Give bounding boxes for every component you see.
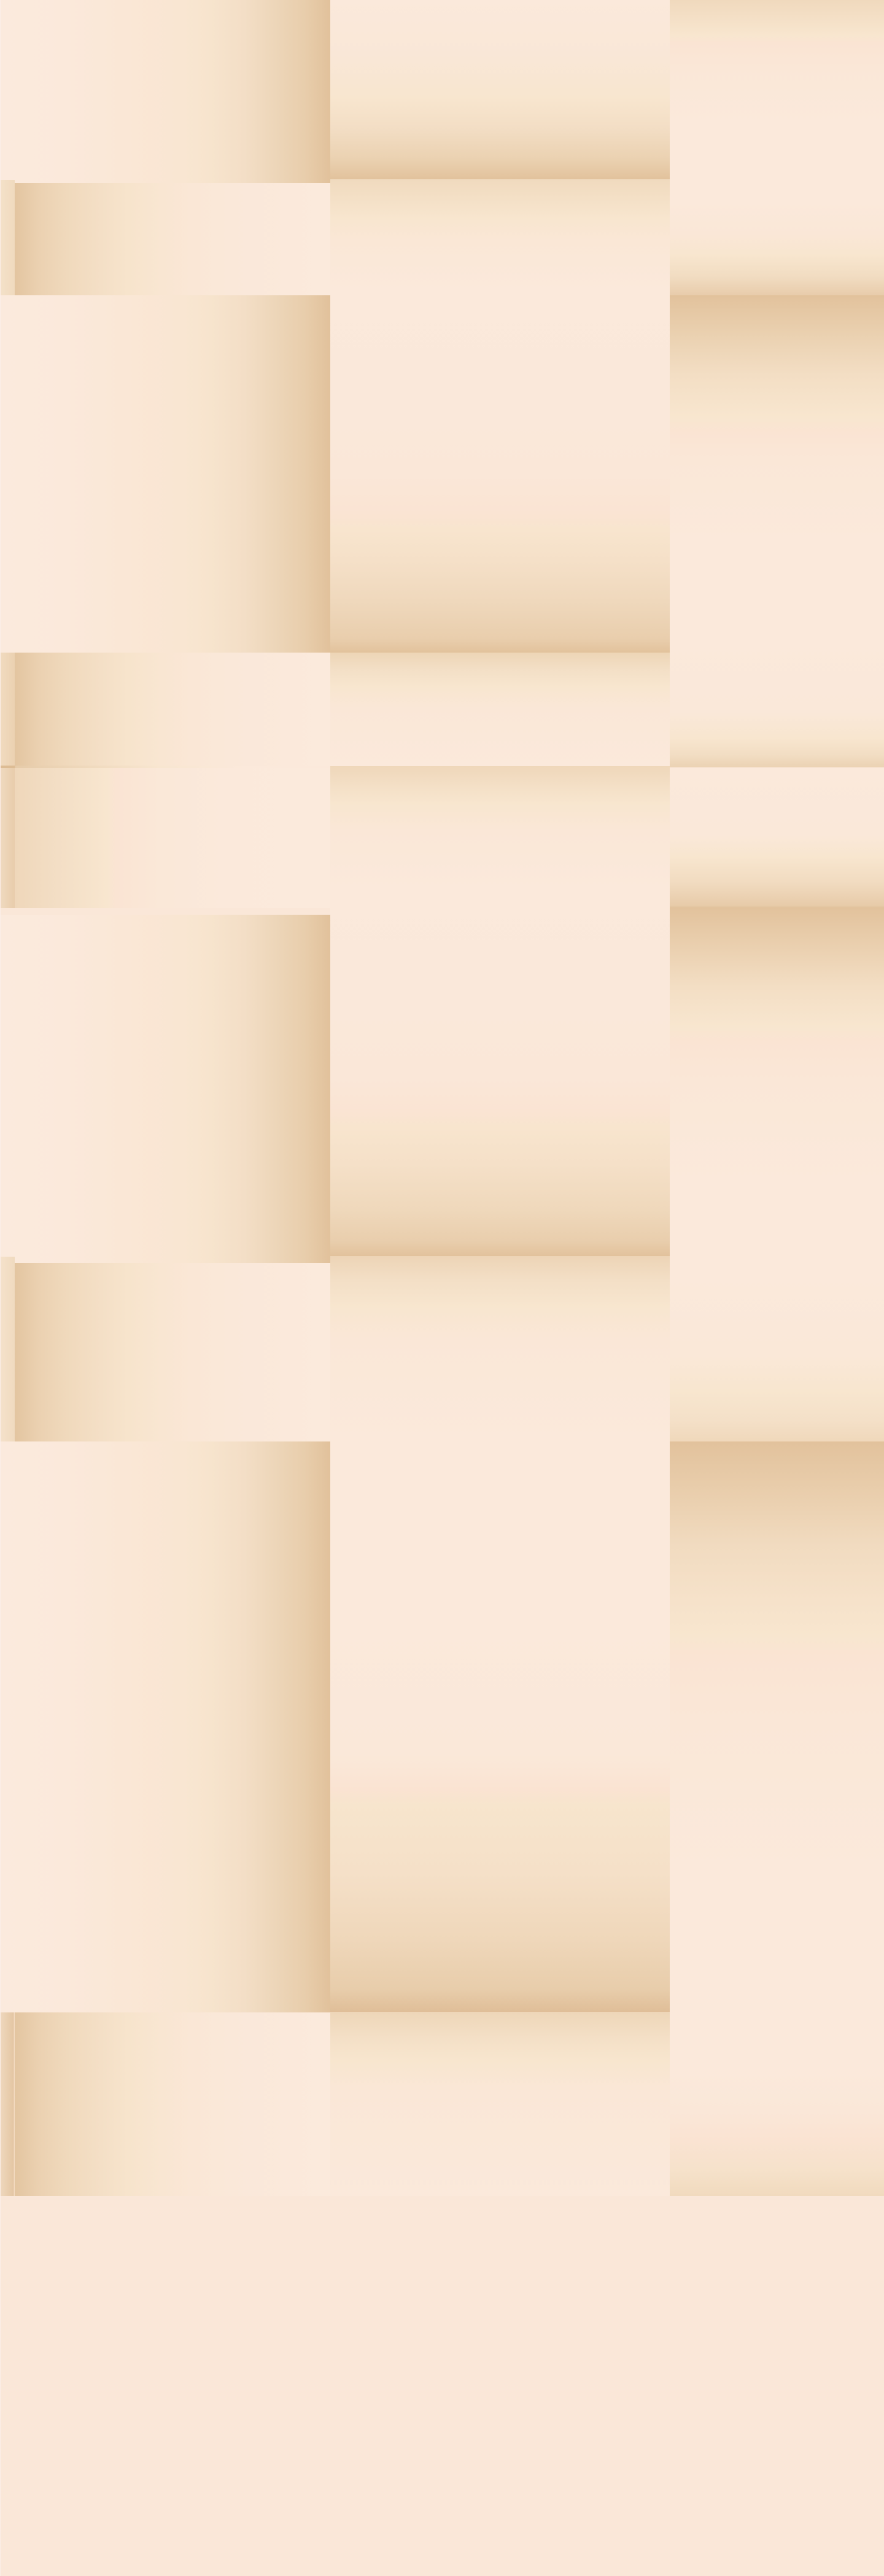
panel: left strip 3 bbox=[0, 768, 15, 908]
panel: left column block 9 bbox=[15, 2012, 330, 2196]
panel: right column block 2 bbox=[670, 295, 884, 767]
panel: right column block 1 bbox=[670, 0, 884, 295]
panel: left column block 3 bbox=[0, 295, 330, 653]
panel: left column block 6 bbox=[0, 915, 330, 1263]
panel: left column block 2 bbox=[15, 183, 330, 295]
panel: left strip 5 bbox=[0, 2012, 15, 2196]
panel: left column block 1 bbox=[0, 0, 330, 183]
panel: left column block 7 bbox=[15, 1263, 330, 1441]
panel: left column block 5 bbox=[15, 768, 330, 908]
panel: middle column block 2 bbox=[330, 179, 670, 653]
left edge line bbox=[0, 0, 1, 2576]
panel: left strip 1 bbox=[0, 180, 15, 295]
panel: left column block 4 bbox=[15, 653, 330, 766]
panel: middle column block 1 bbox=[330, 0, 670, 179]
panel: middle column block 3 bbox=[330, 653, 670, 766]
panel: left strip 2 bbox=[0, 653, 15, 766]
panel: middle column block 4 bbox=[330, 766, 670, 1256]
panel: right column block 4 bbox=[670, 907, 884, 1441]
panel: left strip 4 bbox=[0, 1257, 15, 1441]
panel: middle column block 5 bbox=[330, 1256, 670, 2012]
panel: right column block 3 bbox=[670, 767, 884, 907]
panel: middle column block 6 bbox=[330, 2012, 670, 2196]
panel: left column block 8 bbox=[0, 1441, 330, 2012]
divider band bbox=[0, 766, 330, 768]
panel: right column block 5 bbox=[670, 1441, 884, 2196]
